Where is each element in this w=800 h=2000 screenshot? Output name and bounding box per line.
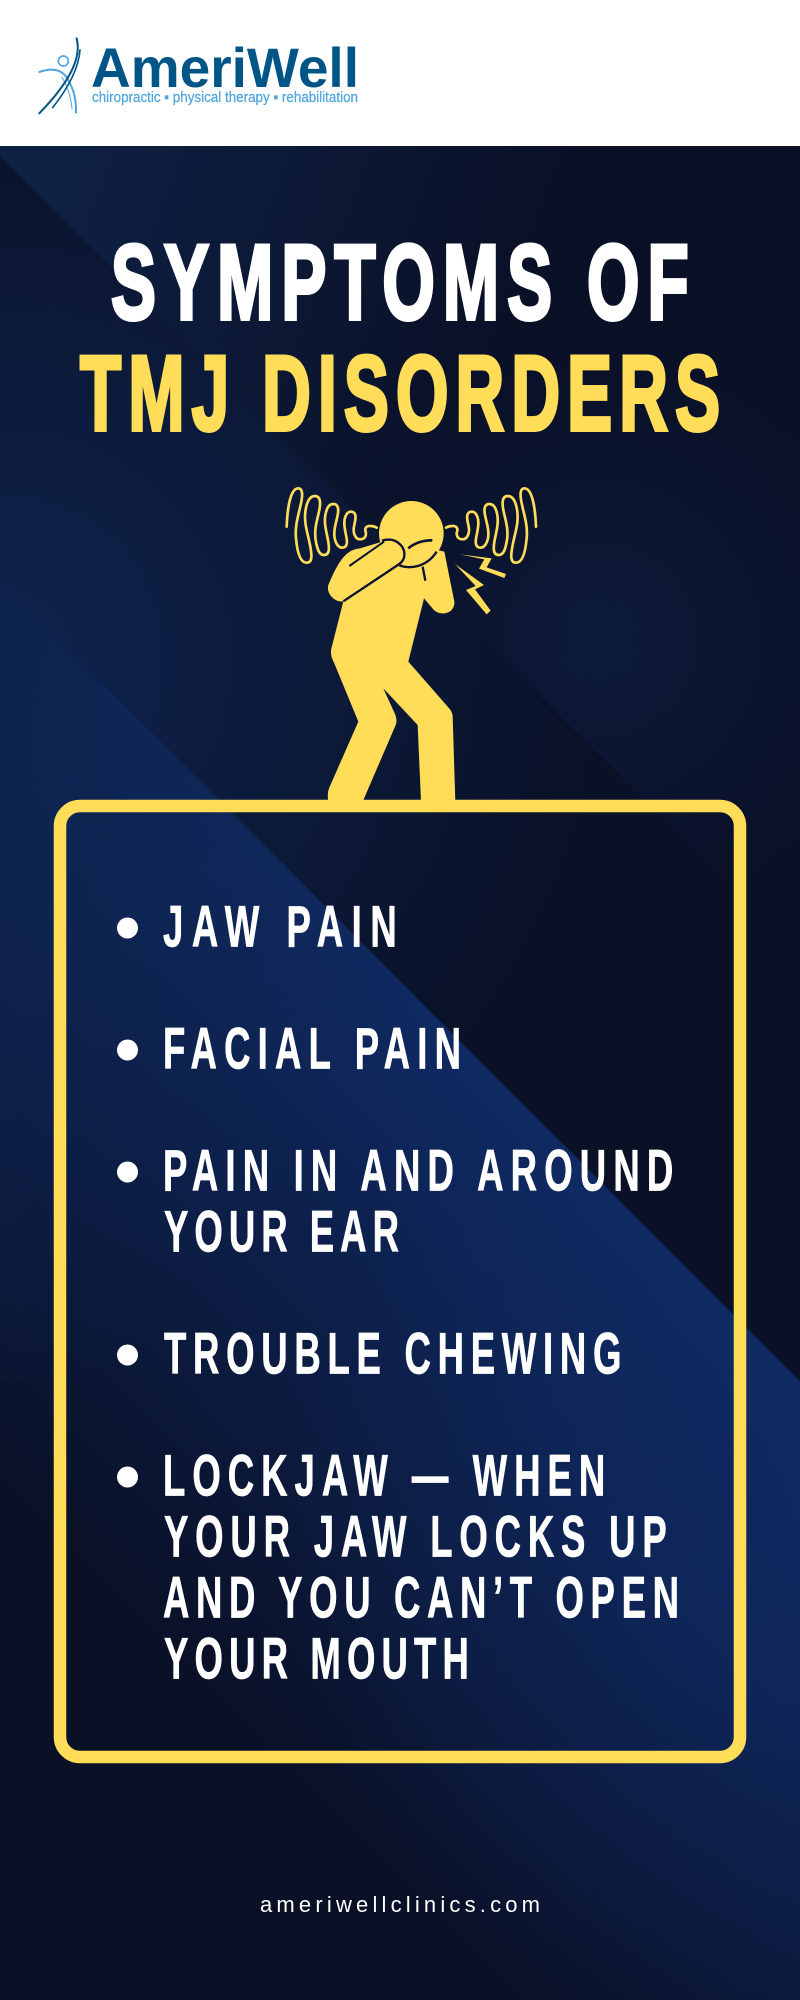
logo xyxy=(39,36,359,113)
icon: person with jaw pain xyxy=(287,488,536,802)
logo wordmark: AmeriWell xyxy=(91,36,359,99)
icon: logo figure xyxy=(39,38,80,113)
title xyxy=(80,222,720,453)
head xyxy=(379,501,444,566)
bullet 3: ear pain: YOUR EAR xyxy=(164,1200,399,1265)
bullet 5: lockjaw: LOCKJAW — WHEN xyxy=(163,1444,605,1509)
panel: symptoms list xyxy=(60,806,740,1757)
bullet 2: facial pain: FACIAL PAIN xyxy=(163,1017,461,1082)
bullet 5: lockjaw xyxy=(117,1444,679,1692)
body xyxy=(328,538,455,802)
arm and face lines xyxy=(343,540,437,601)
sound waves right xyxy=(446,488,536,563)
title line 2: TMJ DISORDERS xyxy=(80,333,720,453)
bullet 4: trouble chewing: TROUBLE CHEWING xyxy=(164,1322,621,1387)
panel border xyxy=(60,806,740,1757)
bullet 5: lockjaw: YOUR MOUTH xyxy=(164,1627,469,1692)
sound waves left xyxy=(287,488,377,563)
logo tagline: chiropractic ▪ physical therapy ▪ rehabilitation xyxy=(92,89,358,106)
header band xyxy=(0,0,800,146)
title line 1: SYMPTOMS OF xyxy=(111,222,689,342)
bullet 5: lockjaw: AND YOU CAN’T OPEN xyxy=(163,1566,679,1631)
footer url: ameriwellclinics.com xyxy=(260,1892,540,1917)
bullet 3: ear pain xyxy=(117,1139,673,1265)
pain bolts xyxy=(455,554,506,614)
bullet 3: ear pain: PAIN IN AND AROUND xyxy=(163,1139,673,1204)
bullet 1: jaw pain: JAW PAIN xyxy=(163,895,397,960)
bullet 5: lockjaw: YOUR JAW LOCKS UP xyxy=(164,1505,667,1570)
